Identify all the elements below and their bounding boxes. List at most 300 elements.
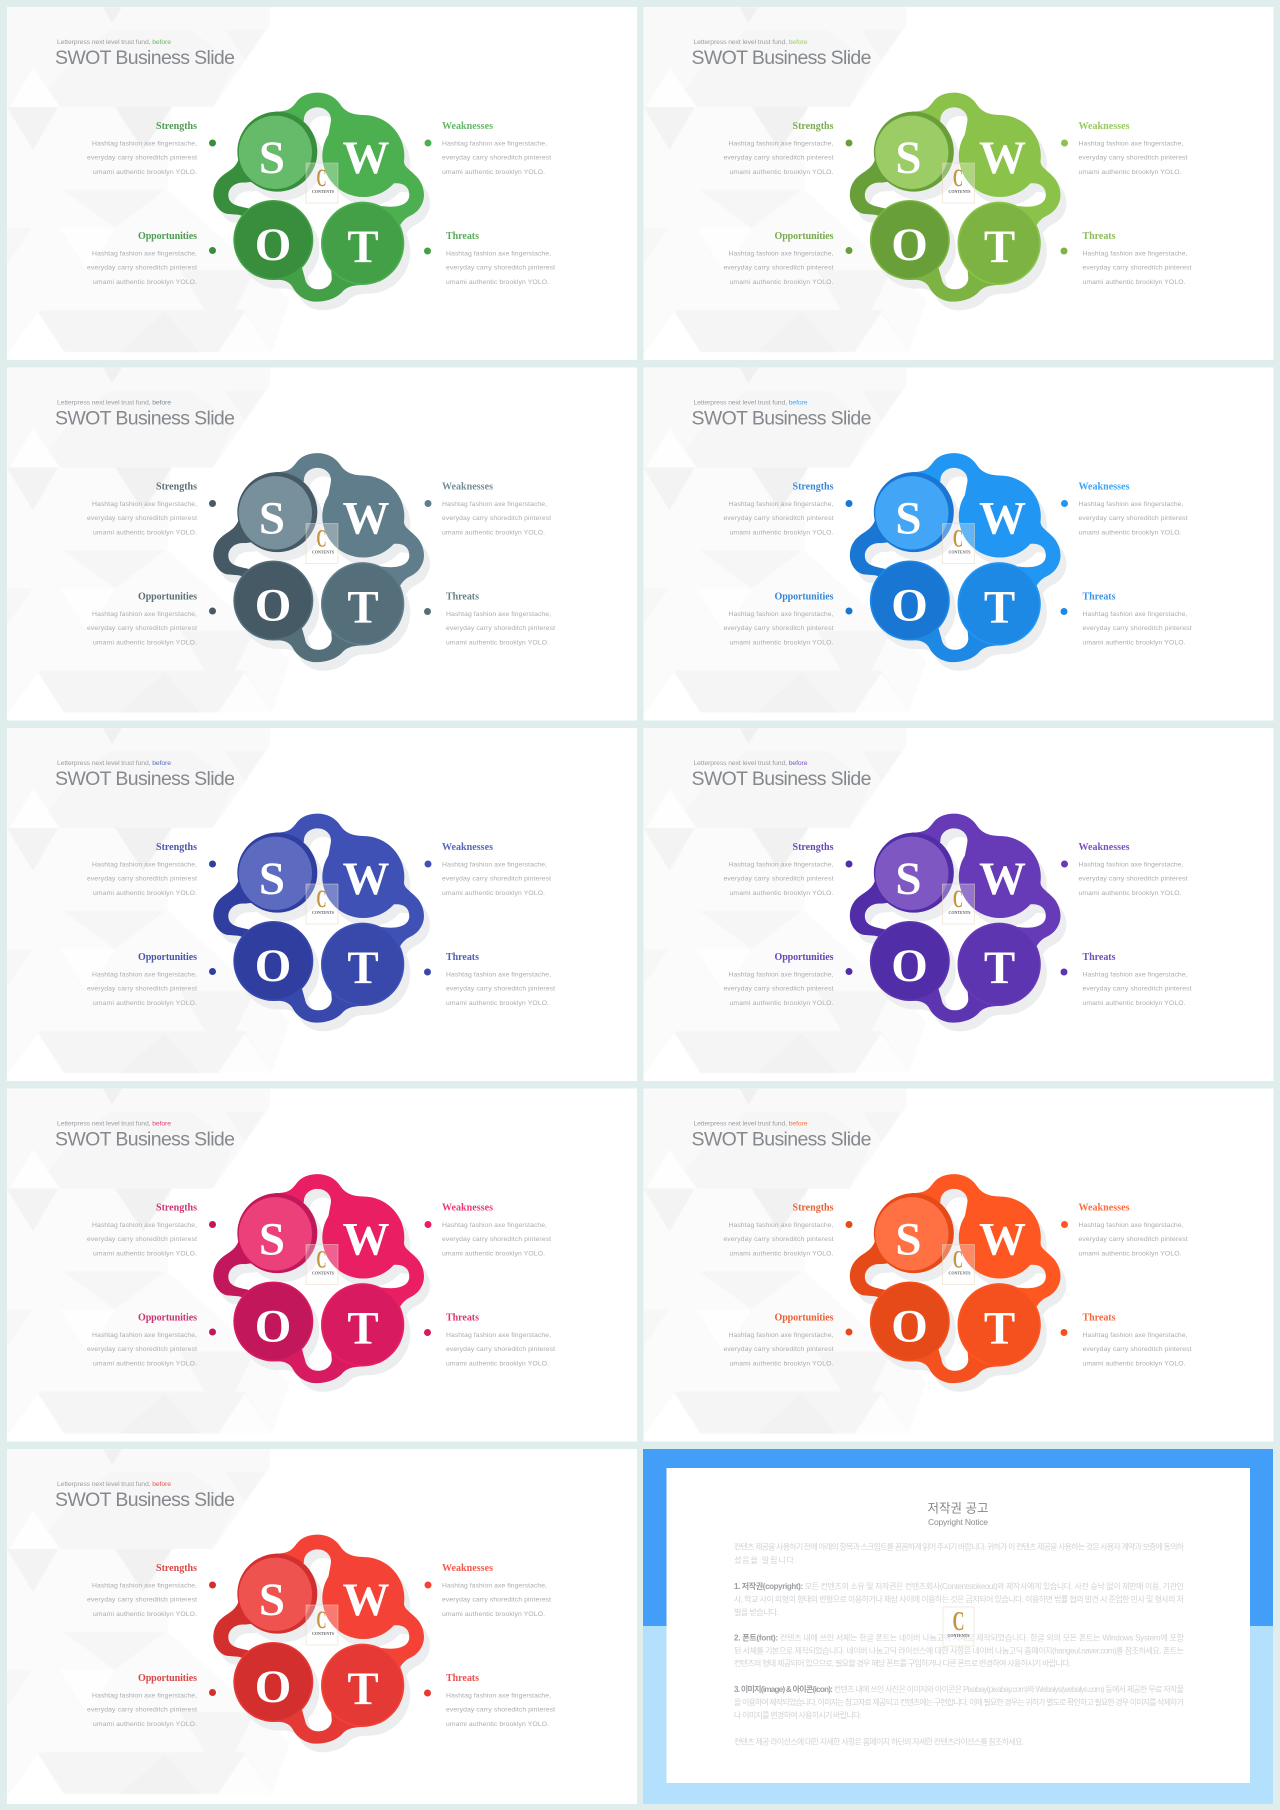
text: strengths: Strengths — [156, 121, 197, 132]
text: threats: Hashtag fashion axe fingerstache, — [446, 611, 551, 618]
icon: bullet dots — [209, 1221, 432, 1336]
text: strengths: Hashtag fashion axe fingerstache, — [92, 140, 197, 148]
text: section 1 copyright: 사, 학교 사이 외형의 형태의 변형으로 이용하거나 제삼 사이에 이용하는 것은 금지되어 있습니다. 이용하면 법률 협의 발견 시 준엄한 민사 및 형사의 처 — [734, 1594, 1184, 1604]
text: weaknesses — [442, 1202, 551, 1258]
icon: watermark logo: C — [316, 526, 326, 552]
chart: SWOT clover: S — [259, 492, 285, 544]
text: strengths: umami authentic brooklyn YOLO. — [93, 890, 197, 897]
text: opportunities: Opportunities — [138, 231, 197, 242]
icon: watermark logo — [942, 524, 974, 564]
text: opportunities: umami authentic brooklyn YOLO. — [93, 640, 197, 646]
text: strengths: Hashtag fashion axe fingerstache, — [92, 862, 197, 868]
text: weaknesses: Hashtag fashion axe fingerstache, — [442, 501, 547, 508]
text: threats — [1082, 592, 1192, 646]
text: strengths: Strengths — [792, 1202, 834, 1214]
chart: SWOT clover: W — [979, 1214, 1026, 1266]
text: strengths: Hashtag fashion axe fingerstache, — [728, 501, 834, 508]
icon: watermark logo — [942, 163, 974, 203]
icon: watermark logo: C — [316, 1607, 326, 1634]
text: threats — [446, 952, 555, 1007]
text: threats — [446, 231, 555, 286]
text: opportunities: Hashtag fashion axe fingerstache, — [92, 1692, 197, 1700]
text: threats: Threats — [446, 1312, 479, 1324]
heading: copyright title — [928, 1502, 988, 1527]
text: opportunities: Opportunities — [774, 231, 834, 242]
chart: SWOT clover — [850, 93, 1066, 310]
text: opportunities: Opportunities — [774, 592, 834, 602]
text: weaknesses — [442, 482, 551, 536]
text: opportunities — [87, 1673, 197, 1728]
text: opportunities — [724, 231, 834, 286]
text: strengths — [87, 121, 197, 176]
text: strengths — [724, 482, 834, 536]
text: weaknesses: Weaknesses — [1078, 121, 1130, 132]
text: opportunities: umami authentic brooklyn YOLO. — [730, 1000, 834, 1007]
heading: slide title: Letterpress next level trust fund, before — [57, 400, 171, 406]
icon: bullet dots — [846, 860, 1068, 976]
text: opportunities: Hashtag fashion axe fingerstache, — [92, 611, 197, 618]
text: strengths: everyday carry shoreditch pinterest — [724, 515, 834, 522]
text: threats: Threats — [1082, 592, 1116, 602]
text: weaknesses — [1078, 121, 1188, 176]
text: strengths: everyday carry shoreditch pinterest — [87, 876, 197, 882]
text: threats: Threats — [446, 1673, 479, 1684]
text: opportunities: Opportunities — [138, 952, 197, 963]
text: threats: Hashtag fashion axe fingerstache, — [446, 1692, 551, 1700]
text: strengths: everyday carry shoreditch pinterest — [724, 154, 834, 162]
text: weaknesses: Hashtag fashion axe fingerstache, — [1078, 1222, 1184, 1229]
text: strengths — [87, 1202, 197, 1258]
heading: slide title: Letterpress next level trust fund, before — [694, 1120, 808, 1128]
text: opportunities: Opportunities — [774, 1312, 834, 1324]
text: opportunities: Hashtag fashion axe fingerstache, — [92, 972, 197, 978]
heading: slide title: SWOT Business Slide — [692, 1128, 872, 1150]
text: weaknesses: umami authentic brooklyn YOLO. — [442, 1611, 545, 1618]
text: weaknesses: everyday carry shoreditch pinterest — [1078, 154, 1188, 162]
text: weaknesses — [442, 1563, 551, 1618]
icon: bullet dots — [209, 1582, 432, 1696]
chart: SWOT clover: S — [259, 1574, 285, 1626]
text: strengths: Hashtag fashion axe fingerstache, — [728, 862, 834, 868]
chart: SWOT clover: O — [891, 940, 928, 992]
chart: SWOT clover: T — [347, 1302, 379, 1354]
chart: SWOT clover: W — [342, 492, 390, 544]
chart: SWOT clover: T — [984, 582, 1015, 634]
text: strengths — [87, 842, 197, 897]
text: opportunities — [87, 231, 197, 286]
chart: SWOT clover: W — [979, 132, 1026, 184]
text: strengths: Strengths — [156, 842, 197, 853]
text: weaknesses: everyday carry shoreditch pinterest — [1078, 515, 1188, 522]
icon: watermark logo: CONTENTS — [948, 189, 971, 194]
text: opportunities: Hashtag fashion axe fingerstache, — [728, 1332, 834, 1339]
heading: slide title: SWOT Business Slide — [692, 47, 872, 69]
text: opportunities: Opportunities — [138, 1673, 197, 1684]
text: strengths: Hashtag fashion axe fingerstache, — [728, 1222, 834, 1229]
text: threats: Threats — [446, 952, 479, 963]
icon: bullet dots — [846, 1221, 1068, 1336]
panel: light green SWOT slide — [644, 7, 1274, 360]
chart: SWOT clover: W — [342, 853, 390, 905]
icon: watermark logo — [306, 1605, 338, 1645]
chart: SWOT clover: W — [979, 492, 1026, 544]
text: strengths: everyday carry shoreditch pinterest — [87, 154, 197, 162]
text: opportunities — [87, 592, 197, 646]
text: opportunities: umami authentic brooklyn YOLO. — [93, 1000, 197, 1007]
text: threats: umami authentic brooklyn YOLO. — [446, 1721, 549, 1728]
chart: SWOT clover: W — [342, 132, 390, 184]
icon: watermark logo — [306, 1244, 338, 1284]
text: opportunities: Hashtag fashion axe fingerstache, — [92, 1332, 197, 1339]
text: threats: everyday carry shoreditch pinterest — [446, 986, 555, 992]
text: threats: Hashtag fashion axe fingerstache, — [446, 972, 551, 978]
text: threats: umami authentic brooklyn YOLO. — [1082, 1360, 1186, 1368]
text: opportunities: Hashtag fashion axe fingerstache, — [92, 250, 197, 258]
text: opportunities: everyday carry shoreditch pinterest — [87, 264, 197, 272]
text: strengths: umami authentic brooklyn YOLO. — [730, 169, 834, 176]
text: strengths — [724, 121, 834, 176]
text: opportunities: umami authentic brooklyn YOLO. — [93, 1360, 197, 1368]
text: threats: everyday carry shoreditch pinterest — [446, 625, 555, 632]
text: strengths — [87, 482, 197, 536]
heading: slide title: Letterpress next level trust fund, before — [694, 760, 808, 767]
text: weaknesses: umami authentic brooklyn YOLO. — [1078, 530, 1182, 536]
text: threats: umami authentic brooklyn YOLO. — [446, 279, 549, 286]
icon: watermark logo — [306, 524, 338, 564]
text: opportunities: umami authentic brooklyn YOLO. — [93, 279, 197, 286]
text: opportunities: Opportunities — [138, 592, 197, 602]
chart: SWOT clover: T — [984, 1302, 1015, 1354]
text: weaknesses: everyday carry shoreditch pinterest — [1078, 876, 1188, 882]
text: strengths: Strengths — [156, 1563, 197, 1574]
text: weaknesses: everyday carry shoreditch pinterest — [442, 876, 551, 882]
text: weaknesses: everyday carry shoreditch pinterest — [442, 154, 551, 162]
chart: SWOT clover — [850, 1174, 1066, 1392]
icon: watermark logo: C — [952, 1606, 964, 1636]
text: threats: umami authentic brooklyn YOLO. — [446, 640, 549, 646]
chart: SWOT clover: S — [259, 853, 285, 905]
icon: watermark logo: C — [316, 165, 326, 192]
icon: watermark logo: C — [953, 165, 963, 192]
heading: slide title: SWOT Business Slide — [692, 408, 872, 430]
text: strengths: Hashtag fashion axe fingerstache, — [92, 1582, 197, 1590]
chart: SWOT clover: S — [895, 853, 922, 905]
text: weaknesses: Hashtag fashion axe fingerstache, — [1078, 862, 1184, 868]
text: weaknesses: umami authentic brooklyn YOLO. — [1078, 1250, 1182, 1258]
text: opportunities: everyday carry shoreditch pinterest — [724, 1346, 834, 1353]
text: weaknesses: Weaknesses — [442, 1563, 493, 1574]
text: weaknesses: umami authentic brooklyn YOLO. — [442, 890, 545, 897]
text: section 2 font — [734, 1632, 1185, 1668]
text: opportunities — [87, 952, 197, 1007]
chart: SWOT clover: S — [895, 1214, 922, 1266]
text: threats: Threats — [1082, 1312, 1116, 1324]
icon: watermark logo — [942, 1244, 974, 1284]
text: strengths: Strengths — [156, 1202, 197, 1214]
text: section 2 font: 컨텐츠의 형태 제공되어 있으므로, 필요할 경우 해당 폰트를 구입하거나 다른 폰트로 변경하여 사용하시기 바랍니다. — [734, 1658, 1071, 1668]
chart: SWOT clover: T — [347, 582, 379, 634]
icon: bullet dots — [209, 500, 432, 615]
text: strengths — [87, 1563, 197, 1618]
text: strengths: everyday carry shoreditch pinterest — [87, 1596, 197, 1604]
icon: bullet dots — [846, 140, 1068, 254]
text: strengths: everyday carry shoreditch pinterest — [724, 1236, 834, 1243]
text: threats: everyday carry shoreditch pinterest — [1082, 1346, 1192, 1353]
text: weaknesses — [1078, 482, 1188, 536]
icon: watermark logo — [306, 884, 338, 924]
text: section 3 image and icon: 3. 이미지(image) & 아이콘(icon): 컨텐츠 내에 쓰인 사진은 이미지와 아이콘은 Pixabay(pixabay.com)와 Webalys(webalys.com) 등에서 제공한 무료 저작물 — [734, 1684, 1184, 1694]
text: threats: everyday carry shoreditch pinterest — [1082, 264, 1192, 272]
panel: blue SWOT slide — [644, 368, 1274, 720]
text: threats: umami authentic brooklyn YOLO. — [446, 1360, 549, 1368]
text: strengths: umami authentic brooklyn YOLO. — [93, 169, 197, 176]
text: section 2 font: 된 서체를 기본으로 제작되었습니다. 네이버 나눔고딕 라이선스에 대한 사항은 네이버 나눔고딕 홈페이지(hangeul.naver.com)를 참조하세요. 폰트는 — [734, 1646, 1184, 1656]
text: opportunities: everyday carry shoreditch pinterest — [724, 264, 834, 272]
chart: SWOT clover: W — [342, 1574, 390, 1626]
icon: bullet dots — [846, 500, 1068, 615]
text: weaknesses: Weaknesses — [442, 482, 493, 492]
text: weaknesses: everyday carry shoreditch pinterest — [442, 1596, 551, 1604]
chart: SWOT clover: T — [984, 942, 1015, 994]
text: threats: umami authentic brooklyn YOLO. — [1082, 1000, 1186, 1007]
text: threats: Hashtag fashion axe fingerstache, — [1082, 250, 1188, 258]
text: strengths: everyday carry shoreditch pinterest — [87, 1236, 197, 1243]
text: strengths: everyday carry shoreditch pinterest — [724, 876, 834, 882]
chart: SWOT clover: O — [891, 219, 928, 271]
text: opportunities: Opportunities — [774, 952, 834, 963]
text: weaknesses: Weaknesses — [442, 842, 493, 853]
text: section 1 copyright: 1. 저작권(copyright): 모든 컨텐츠의 소유 및 저작권은 컨텐츠회사(Contentstokeout)와 제작사에게 있습니다. 사전 승낙 없이 재판매 이용, 기관인 — [734, 1581, 1184, 1591]
text: weaknesses — [442, 121, 551, 176]
chart: SWOT clover — [213, 814, 430, 1031]
text: threats: Threats — [1082, 952, 1116, 963]
text: section 1 copyright — [734, 1581, 1184, 1617]
text: threats: Hashtag fashion axe fingerstache, — [1082, 972, 1188, 978]
text: threats: everyday carry shoreditch pinterest — [446, 264, 555, 272]
text: threats: Hashtag fashion axe fingerstache, — [446, 1332, 551, 1339]
chart: SWOT clover — [213, 93, 430, 310]
text: introduction: 셨음을 알립니다. — [734, 1555, 797, 1565]
chart: SWOT clover: O — [891, 580, 928, 632]
text: introduction — [734, 1542, 1185, 1565]
text: strengths: everyday carry shoreditch pinterest — [87, 515, 197, 522]
icon: watermark logo: CONTENTS — [312, 550, 335, 554]
chart: SWOT clover — [213, 1174, 430, 1392]
text: weaknesses: Weaknesses — [1078, 842, 1130, 853]
text: weaknesses: umami authentic brooklyn YOLO. — [442, 530, 545, 536]
chart: SWOT clover — [850, 814, 1066, 1031]
text: weaknesses: Hashtag fashion axe fingerstache, — [442, 140, 547, 148]
text: weaknesses: everyday carry shoreditch pinterest — [442, 515, 551, 522]
panel: purple SWOT slide — [644, 728, 1274, 1081]
text: strengths: umami authentic brooklyn YOLO. — [730, 1250, 834, 1258]
chart: SWOT clover — [213, 453, 430, 671]
icon: watermark logo: CONTENTS — [312, 189, 335, 194]
icon: watermark logo: CONTENTS — [948, 910, 971, 915]
text: strengths — [724, 1202, 834, 1258]
panel: green SWOT slide — [7, 7, 637, 360]
text: opportunities: everyday carry shoreditch pinterest — [724, 625, 834, 632]
icon: watermark logo: CONTENTS — [312, 1631, 335, 1636]
icon: watermark logo: C — [953, 1246, 963, 1274]
text: weaknesses: Weaknesses — [1078, 1202, 1130, 1214]
icon: watermark logo — [306, 163, 338, 203]
text: weaknesses — [1078, 842, 1188, 897]
text: opportunities: Hashtag fashion axe fingerstache, — [728, 250, 834, 258]
heading: slide title: Letterpress next level trust fund, before — [57, 1120, 171, 1128]
text: threats: Hashtag fashion axe fingerstache, — [1082, 1332, 1188, 1339]
text: strengths: umami authentic brooklyn YOLO. — [93, 1611, 197, 1618]
text: weaknesses: umami authentic brooklyn YOLO. — [1078, 169, 1182, 176]
heading: slide title: Letterpress next level trust fund, before — [57, 760, 171, 767]
text: section 3 image and icon: 을 이용하여 제작되었습니다. 이미지는 참고자료 제공되고 컨텐츠에는 구현합니다. 이에 필요한 경우는 귀하가 별도로 확인하고 필요한 경우 이미지를 삭제하거 — [734, 1697, 1184, 1707]
chart: SWOT clover: T — [984, 221, 1015, 273]
chart: SWOT clover: W — [979, 853, 1026, 905]
chart: SWOT clover — [213, 1535, 430, 1752]
text: strengths: Strengths — [156, 482, 197, 492]
text: opportunities: umami authentic brooklyn YOLO. — [730, 640, 834, 646]
text: threats: Hashtag fashion axe fingerstache, — [446, 250, 551, 258]
text: threats: Threats — [446, 231, 479, 242]
text: weaknesses: Hashtag fashion axe fingerstache, — [442, 1222, 547, 1229]
text: weaknesses: Hashtag fashion axe fingerstache, — [442, 862, 547, 868]
text: opportunities — [724, 952, 834, 1007]
heading: slide title: Letterpress next level trust fund, before — [694, 400, 808, 406]
heading: copyright title: Copyright Notice — [928, 1517, 988, 1527]
text: section 2 font: 2. 폰트(font): 컨텐츠 내에 쓰인 서체는 한글 폰트는 네이버 나눔고딕 서체로 제작되었습니다. 한글 외의 모든 폰트는 Windows System에 포함 — [734, 1632, 1185, 1642]
text: introduction: 컨텐츠 제공을 사용하기 전에 아래의 항목과 스크립트를 꼼꼼하게 읽어 주시기 바랍니다. 귀하가 이 컨텐츠 제공을 사용하는 것은 사용자 계약과 보증에 동의하 — [734, 1542, 1185, 1552]
icon: watermark logo: C — [953, 526, 963, 552]
text: threats — [1082, 952, 1192, 1007]
text: opportunities — [724, 1312, 834, 1368]
text: threats — [446, 1312, 555, 1368]
icon: watermark logo: C — [316, 1246, 326, 1274]
text: weaknesses: Hashtag fashion axe fingerstache, — [1078, 140, 1184, 148]
text: weaknesses: Weaknesses — [1078, 482, 1130, 492]
text: weaknesses: Hashtag fashion axe fingerstache, — [1078, 501, 1184, 508]
text: strengths: Strengths — [792, 121, 834, 132]
text: threats: Hashtag fashion axe fingerstache, — [1082, 611, 1188, 618]
text: strengths: umami authentic brooklyn YOLO. — [93, 530, 197, 536]
text: opportunities: everyday carry shoreditch pinterest — [724, 986, 834, 992]
text: weaknesses: Weaknesses — [442, 121, 493, 132]
panel: orange SWOT slide — [644, 1088, 1274, 1442]
text: opportunities: Hashtag fashion axe fingerstache, — [728, 972, 834, 978]
text: threats — [1082, 1312, 1192, 1368]
heading: slide title: Letterpress next level trust fund, before — [694, 39, 808, 46]
text: opportunities — [724, 592, 834, 646]
chart: SWOT clover: T — [347, 942, 379, 994]
text: strengths: Hashtag fashion axe fingerstache, — [92, 1222, 197, 1229]
text: opportunities — [87, 1312, 197, 1368]
text: threats: Threats — [446, 592, 479, 602]
icon: watermark logo: C — [316, 886, 326, 913]
text: weaknesses: everyday carry shoreditch pinterest — [442, 1236, 551, 1243]
text: weaknesses: everyday carry shoreditch pinterest — [1078, 1236, 1188, 1243]
panel: red SWOT slide — [7, 1449, 637, 1804]
text: closing note: 컨텐츠 제공 라이선스에 대한 자세한 사항은 홈페이지 하단의 자세한 컨텐츠라이선스를 참조하세요. — [734, 1736, 1024, 1746]
text: strengths: Hashtag fashion axe fingerstache, — [728, 140, 834, 148]
chart: SWOT clover: O — [891, 1300, 928, 1352]
heading: slide title: SWOT Business Slide — [55, 47, 235, 69]
text: threats — [446, 1673, 555, 1728]
text: opportunities: everyday carry shoreditch pinterest — [87, 1706, 197, 1714]
chart: SWOT clover: W — [342, 1214, 390, 1266]
text: threats: everyday carry shoreditch pinterest — [446, 1346, 555, 1353]
text: strengths: umami authentic brooklyn YOLO. — [730, 530, 834, 536]
text: weaknesses — [442, 842, 551, 897]
text: opportunities: umami authentic brooklyn YOLO. — [93, 1721, 197, 1728]
heading: slide title: SWOT Business Slide — [55, 408, 235, 430]
icon: bullet dots — [209, 140, 432, 254]
heading: slide title: SWOT Business Slide — [55, 1489, 235, 1511]
text: threats: everyday carry shoreditch pinterest — [1082, 625, 1192, 632]
text: strengths: umami authentic brooklyn YOLO. — [730, 890, 834, 897]
chart: SWOT clover: T — [347, 221, 379, 273]
chart: SWOT clover: O — [255, 219, 291, 271]
text: section 3 image and icon — [734, 1684, 1184, 1720]
chart: SWOT clover: O — [255, 940, 291, 992]
heading: copyright title: 저작권 공고 — [928, 1502, 988, 1516]
text: opportunities: everyday carry shoreditch pinterest — [87, 986, 197, 992]
chart: SWOT clover: O — [255, 1661, 291, 1713]
text: opportunities: Hashtag fashion axe fingerstache, — [728, 611, 834, 618]
icon: watermark logo: CONTENTS — [948, 1270, 971, 1276]
text: threats — [446, 592, 555, 646]
icon: watermark logo: CONTENTS — [948, 550, 971, 554]
text: strengths: Hashtag fashion axe fingerstache, — [92, 501, 197, 508]
text: weaknesses: Weaknesses — [442, 1202, 493, 1214]
text: opportunities: umami authentic brooklyn YOLO. — [730, 1360, 834, 1368]
icon: watermark logo: CONTENTS — [312, 910, 335, 915]
text: strengths: Strengths — [792, 482, 834, 492]
text: threats: umami authentic brooklyn YOLO. — [1082, 640, 1186, 646]
panel: indigo SWOT slide — [7, 728, 637, 1081]
chart: SWOT clover: S — [259, 1214, 285, 1266]
chart: SWOT clover: S — [895, 492, 922, 544]
text: section 3 image and icon: 나 이미지를 변경하여 사용하시기 바랍니다. — [734, 1710, 862, 1720]
text: opportunities: umami authentic brooklyn YOLO. — [730, 279, 834, 286]
text: opportunities: Opportunities — [138, 1312, 197, 1324]
icon: watermark logo — [942, 884, 974, 924]
chart: SWOT clover: O — [255, 580, 291, 632]
icon: watermark logo: CONTENTS — [312, 1270, 335, 1276]
text: weaknesses: umami authentic brooklyn YOLO. — [442, 169, 545, 176]
text: threats: umami authentic brooklyn YOLO. — [446, 1000, 549, 1007]
text: weaknesses: umami authentic brooklyn YOLO. — [1078, 890, 1182, 897]
text: strengths — [724, 842, 834, 897]
heading: slide title: Letterpress next level trust fund, before — [57, 39, 171, 46]
heading: slide title: SWOT Business Slide — [55, 768, 235, 790]
text: section 1 copyright: 벌을 받습니다. — [734, 1607, 779, 1617]
chart: SWOT clover: S — [259, 132, 285, 184]
text: strengths: umami authentic brooklyn YOLO. — [93, 1250, 197, 1258]
text: threats: umami authentic brooklyn YOLO. — [1082, 279, 1186, 286]
icon: watermark logo: C — [953, 886, 963, 913]
heading: slide title: SWOT Business Slide — [55, 1128, 235, 1150]
chart: SWOT clover: O — [255, 1300, 291, 1352]
heading: slide title: Letterpress next level trust fund, before — [57, 1481, 171, 1488]
text: opportunities: everyday carry shoreditch pinterest — [87, 1346, 197, 1353]
text: threats: Threats — [1082, 231, 1116, 242]
text: strengths: Strengths — [792, 842, 834, 853]
icon: watermark logo — [943, 1606, 974, 1646]
text: threats: everyday carry shoreditch pinterest — [446, 1706, 555, 1714]
icon: watermark logo: CONTENTS — [947, 1633, 970, 1638]
text: weaknesses: umami authentic brooklyn YOLO. — [442, 1250, 545, 1258]
text: weaknesses: Hashtag fashion axe fingerstache, — [442, 1582, 547, 1590]
heading: slide title: SWOT Business Slide — [692, 768, 872, 790]
